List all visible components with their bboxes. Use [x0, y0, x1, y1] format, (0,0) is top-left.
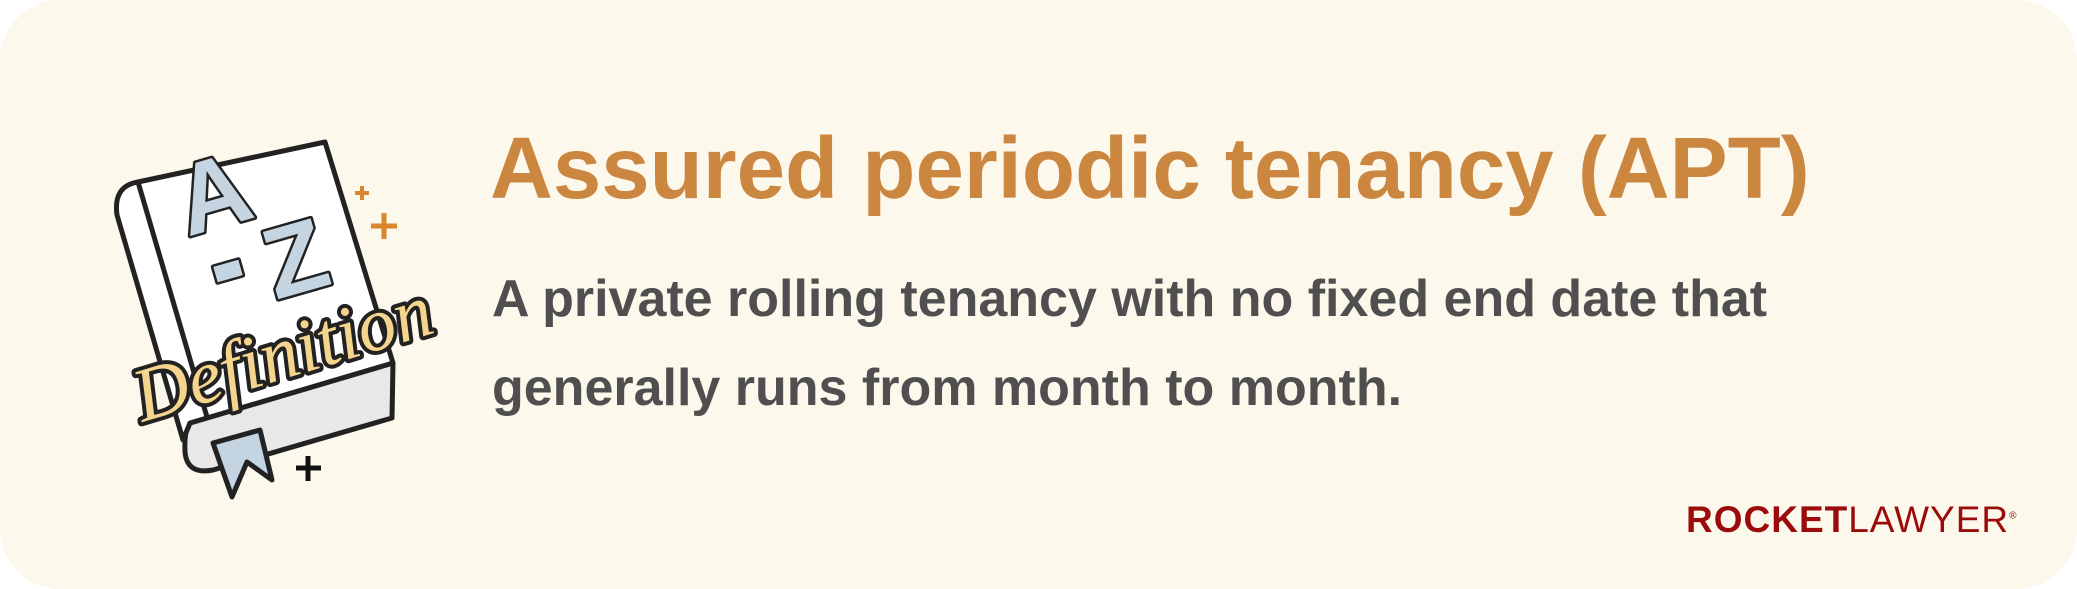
- letters A-Z: Z: [251, 197, 340, 321]
- cover: [116, 142, 393, 440]
- title: Assured periodic tenancy (APT): [490, 120, 1810, 217]
- text: Definition script: Definition: [122, 268, 442, 439]
- letters A-Z: A: [163, 130, 263, 258]
- logo: Rocket Lawyer: ROCKETLAWYER®: [1686, 499, 2018, 540]
- letters A-Z: [163, 130, 340, 321]
- text block: definition: A private rolling tenancy with no fixed end date that generally runs from month to month.: [492, 270, 1767, 417]
- pages block: [185, 363, 393, 471]
- icon: definition book: [114, 130, 442, 500]
- bookmark: [213, 430, 272, 497]
- icon: sparkles: [296, 186, 397, 481]
